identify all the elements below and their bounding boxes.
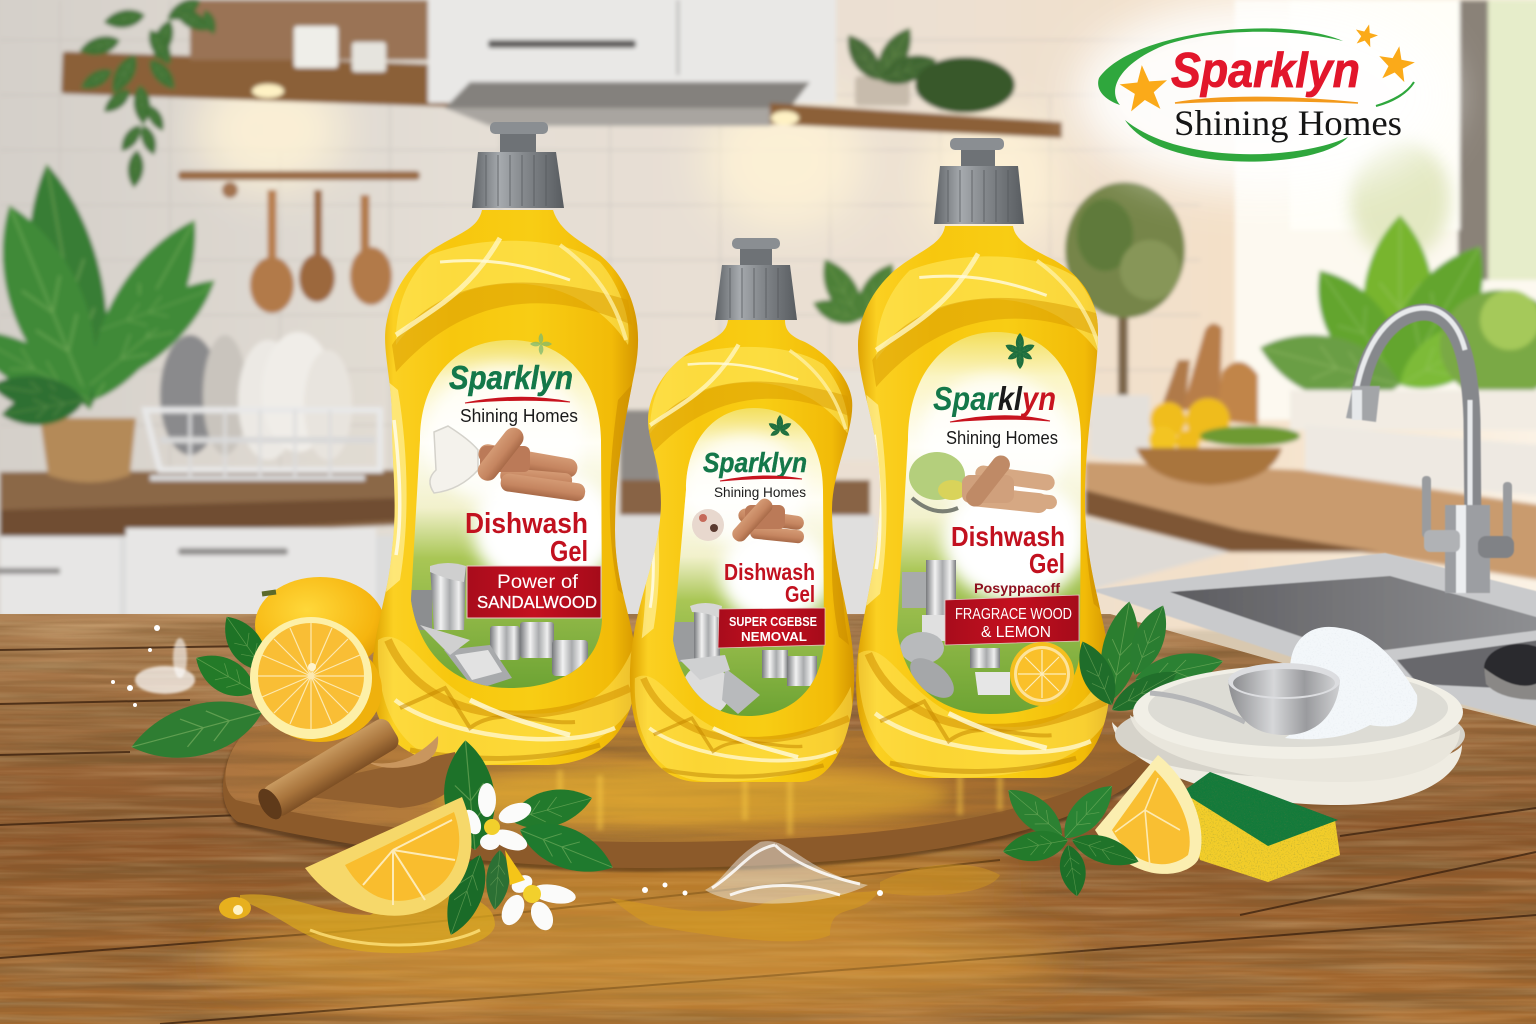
bottle reflections [378,238,636,765]
jasmine flowers [459,783,577,934]
product name: Gel [785,581,815,607]
product name: Dishwash [724,559,815,585]
label leaf emblem [530,333,552,355]
sandalwood sticks [474,424,586,502]
logo brand name: Sparklyn [1171,44,1360,98]
product name: Gel [1029,548,1065,579]
logo orange swoosh [1175,97,1358,103]
bottle body [630,320,854,782]
product name: Dishwash [465,508,588,540]
oil puddle left [219,894,495,953]
left counter [0,470,876,616]
lemon half [228,595,394,761]
brand logo [1077,0,1447,190]
sandalwood stick and block [254,715,460,823]
brand name: Sparklyn [933,380,1056,417]
sandalwood sticks [729,496,805,544]
dish rack with plates [145,332,380,478]
tagline: Shining Homes [946,428,1058,448]
red banner: NEMOVAL [741,629,807,644]
red banner: SANDALWOOD [477,592,597,612]
window [1235,0,1536,420]
cookware [410,563,588,690]
metal cup with handle [1150,663,1340,735]
bottle: grease removal [630,238,854,782]
water splash centre [610,841,1000,941]
brand name: Sparklyn [703,447,807,478]
bottle cap [472,122,564,208]
red banner: & LEMON [981,624,1051,641]
upper shelf right [770,76,1062,138]
label leaf emblem [1004,333,1036,369]
lemon slice on label [1010,642,1074,706]
small subtitle: Posyppacoff [974,580,1060,596]
product name [465,508,588,568]
tree plant right [1065,182,1185,460]
lemon wedge left [305,797,471,916]
potted plant left [0,158,229,482]
logo stars [1118,21,1417,112]
logo swooshes [1098,28,1414,162]
product name: Dishwash [951,521,1065,552]
product name [724,559,815,607]
cutting board [210,720,1160,872]
whole lemon [255,577,385,673]
middle plate [1130,715,1460,782]
upper cabinet and hood [428,0,836,126]
top plate [1133,665,1463,759]
cloth [430,426,478,493]
bottle cap [715,238,797,320]
red banner [945,595,1079,645]
upper shelf left [61,0,452,107]
leaves left [125,608,276,772]
wooden table top [0,600,1536,1024]
table glow [210,840,1070,1010]
back wall [0,0,1536,630]
bottle reflections [635,345,854,782]
red banner [718,608,825,648]
product name: Gel [550,536,588,568]
cookware [900,560,1010,705]
bottle: fragrance wood and lemon [856,138,1111,778]
wall light pools [195,70,1060,250]
label swoosh [950,416,1050,422]
label swoosh [720,476,802,481]
sandalwood sticks [962,452,1058,514]
wood grain texture [0,600,1536,1024]
shelf plants [839,22,1015,113]
window plants [1252,215,1536,415]
faucet [1346,308,1514,593]
herb bundle [909,452,966,511]
hanging plant [77,0,219,189]
label [665,405,830,720]
foam [1285,627,1417,739]
cookware [672,603,817,716]
sponge [1182,772,1340,882]
stacked plates [1112,665,1465,805]
right counter and backsplash [1085,390,1536,590]
red banner: Power of [497,572,579,593]
appliance behind bottles [620,252,904,480]
label [890,330,1087,720]
cutting boards [1162,323,1258,425]
bottom plate [1112,722,1462,805]
brand name: Sparklyn [449,359,573,396]
label [411,333,602,688]
product name [951,521,1065,579]
water splash left [111,625,195,707]
red banner: SUPER CGEBSE [729,614,817,629]
utensil rail [178,171,420,313]
red banner [467,566,601,618]
bottle body [856,226,1110,778]
sink [1090,553,1536,726]
logo tagline: Shining Homes [1174,103,1402,143]
board grain [210,720,1160,845]
flowers and leaves [437,738,620,940]
red banner: FRAGRACE WOOD [955,606,1072,623]
logo glow [1077,0,1447,190]
bottle cap [934,138,1024,224]
leaves behind plates [1069,598,1226,721]
fruit bowl [1136,398,1300,485]
floral accent [692,509,724,541]
bottle: sandalwood [372,122,638,765]
bottle reflections [858,254,1111,778]
label swoosh [465,397,570,403]
bottle body [372,210,638,765]
tagline: Shining Homes [714,484,806,500]
table planks [0,646,1536,1024]
label leaf emblem [767,415,793,438]
lemon wedge right [1095,755,1202,874]
kitchen background [0,0,1536,630]
tagline: Shining Homes [460,406,578,426]
leaves right [999,776,1143,898]
